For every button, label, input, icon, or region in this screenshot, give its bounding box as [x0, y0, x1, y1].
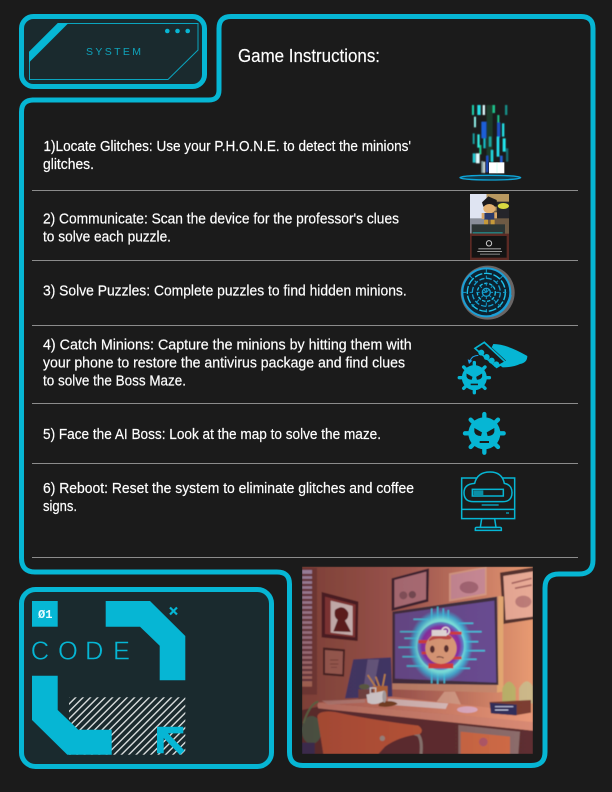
icon: rebooting computer — [462, 472, 515, 530]
glitch burst — [398, 607, 485, 684]
step 6 text — [43, 481, 414, 515]
framed poster — [500, 567, 533, 624]
warm room shading — [302, 566, 502, 754]
code label: CODE — [31, 638, 130, 666]
step 5 text: 5) Face the AI Boss: Look at the map to solve the maze. — [43, 427, 381, 443]
heading: game instructions: Game Instructions: — [238, 46, 380, 66]
monitor — [392, 596, 503, 706]
step 4 text: to solve the Boss Maze. — [43, 373, 186, 389]
framed sketch — [392, 568, 429, 611]
step 6 text: signs. — [43, 499, 77, 515]
icon: phone hitting virus — [459, 342, 527, 393]
number badge: Ø1 — [38, 609, 53, 622]
illustration: glitched computer on desk — [302, 567, 533, 754]
vases — [502, 681, 533, 703]
step 2 text: 2) Communicate: Scan the device for the professor's clues — [43, 212, 399, 228]
arrow — [157, 727, 184, 755]
potted plant — [302, 702, 322, 754]
pencil cup — [358, 674, 388, 700]
hologram base ring — [460, 175, 521, 180]
step 2 text — [43, 212, 399, 246]
router box — [490, 700, 531, 715]
chair — [317, 712, 422, 754]
system label: SYSTEM — [86, 46, 141, 58]
step 4 text — [43, 337, 412, 389]
step 1 text: 1)Locate Glitches: Use your P.H.O.N.E. to detect the minions' — [44, 139, 411, 155]
number badge — [32, 601, 58, 627]
mouse — [457, 706, 478, 713]
corner bracket top — [106, 601, 185, 680]
spilled coffee cup — [366, 688, 398, 707]
books — [345, 657, 392, 698]
step 4 text: your phone to restore the antivirus package and find clues — [43, 355, 405, 371]
framed certificate — [323, 647, 345, 677]
framed drawing — [449, 567, 487, 602]
panel: system badge — [22, 16, 204, 86]
icon: circular maze — [461, 266, 515, 320]
window blinds — [302, 568, 317, 695]
step 2 text: to solve each puzzle. — [43, 230, 171, 246]
close mark — [170, 608, 177, 614]
framed portrait — [322, 592, 358, 641]
keyboard — [387, 699, 448, 709]
step 6 text: 6) Reboot: Reset the system to eliminate glitches and coffee — [43, 481, 414, 497]
icon: figurine photo — [470, 194, 509, 260]
step 1 text — [43, 139, 411, 173]
panel: code card — [22, 590, 272, 766]
step 1 text: glitches. — [43, 157, 94, 173]
icon: glitch hologram — [460, 105, 521, 180]
small virus — [459, 363, 489, 393]
icon: AI boss virus — [465, 414, 504, 453]
step 4 text: 4) Catch Minions: Capture the minions by hitting them with — [43, 337, 412, 353]
step 3 text: 3) Solve Puzzles: Complete puzzles to find hidden minions. — [43, 284, 407, 300]
desk — [302, 697, 533, 754]
hand and phone — [475, 342, 527, 367]
corner bracket bottom — [32, 676, 112, 755]
hatched block — [69, 697, 185, 755]
